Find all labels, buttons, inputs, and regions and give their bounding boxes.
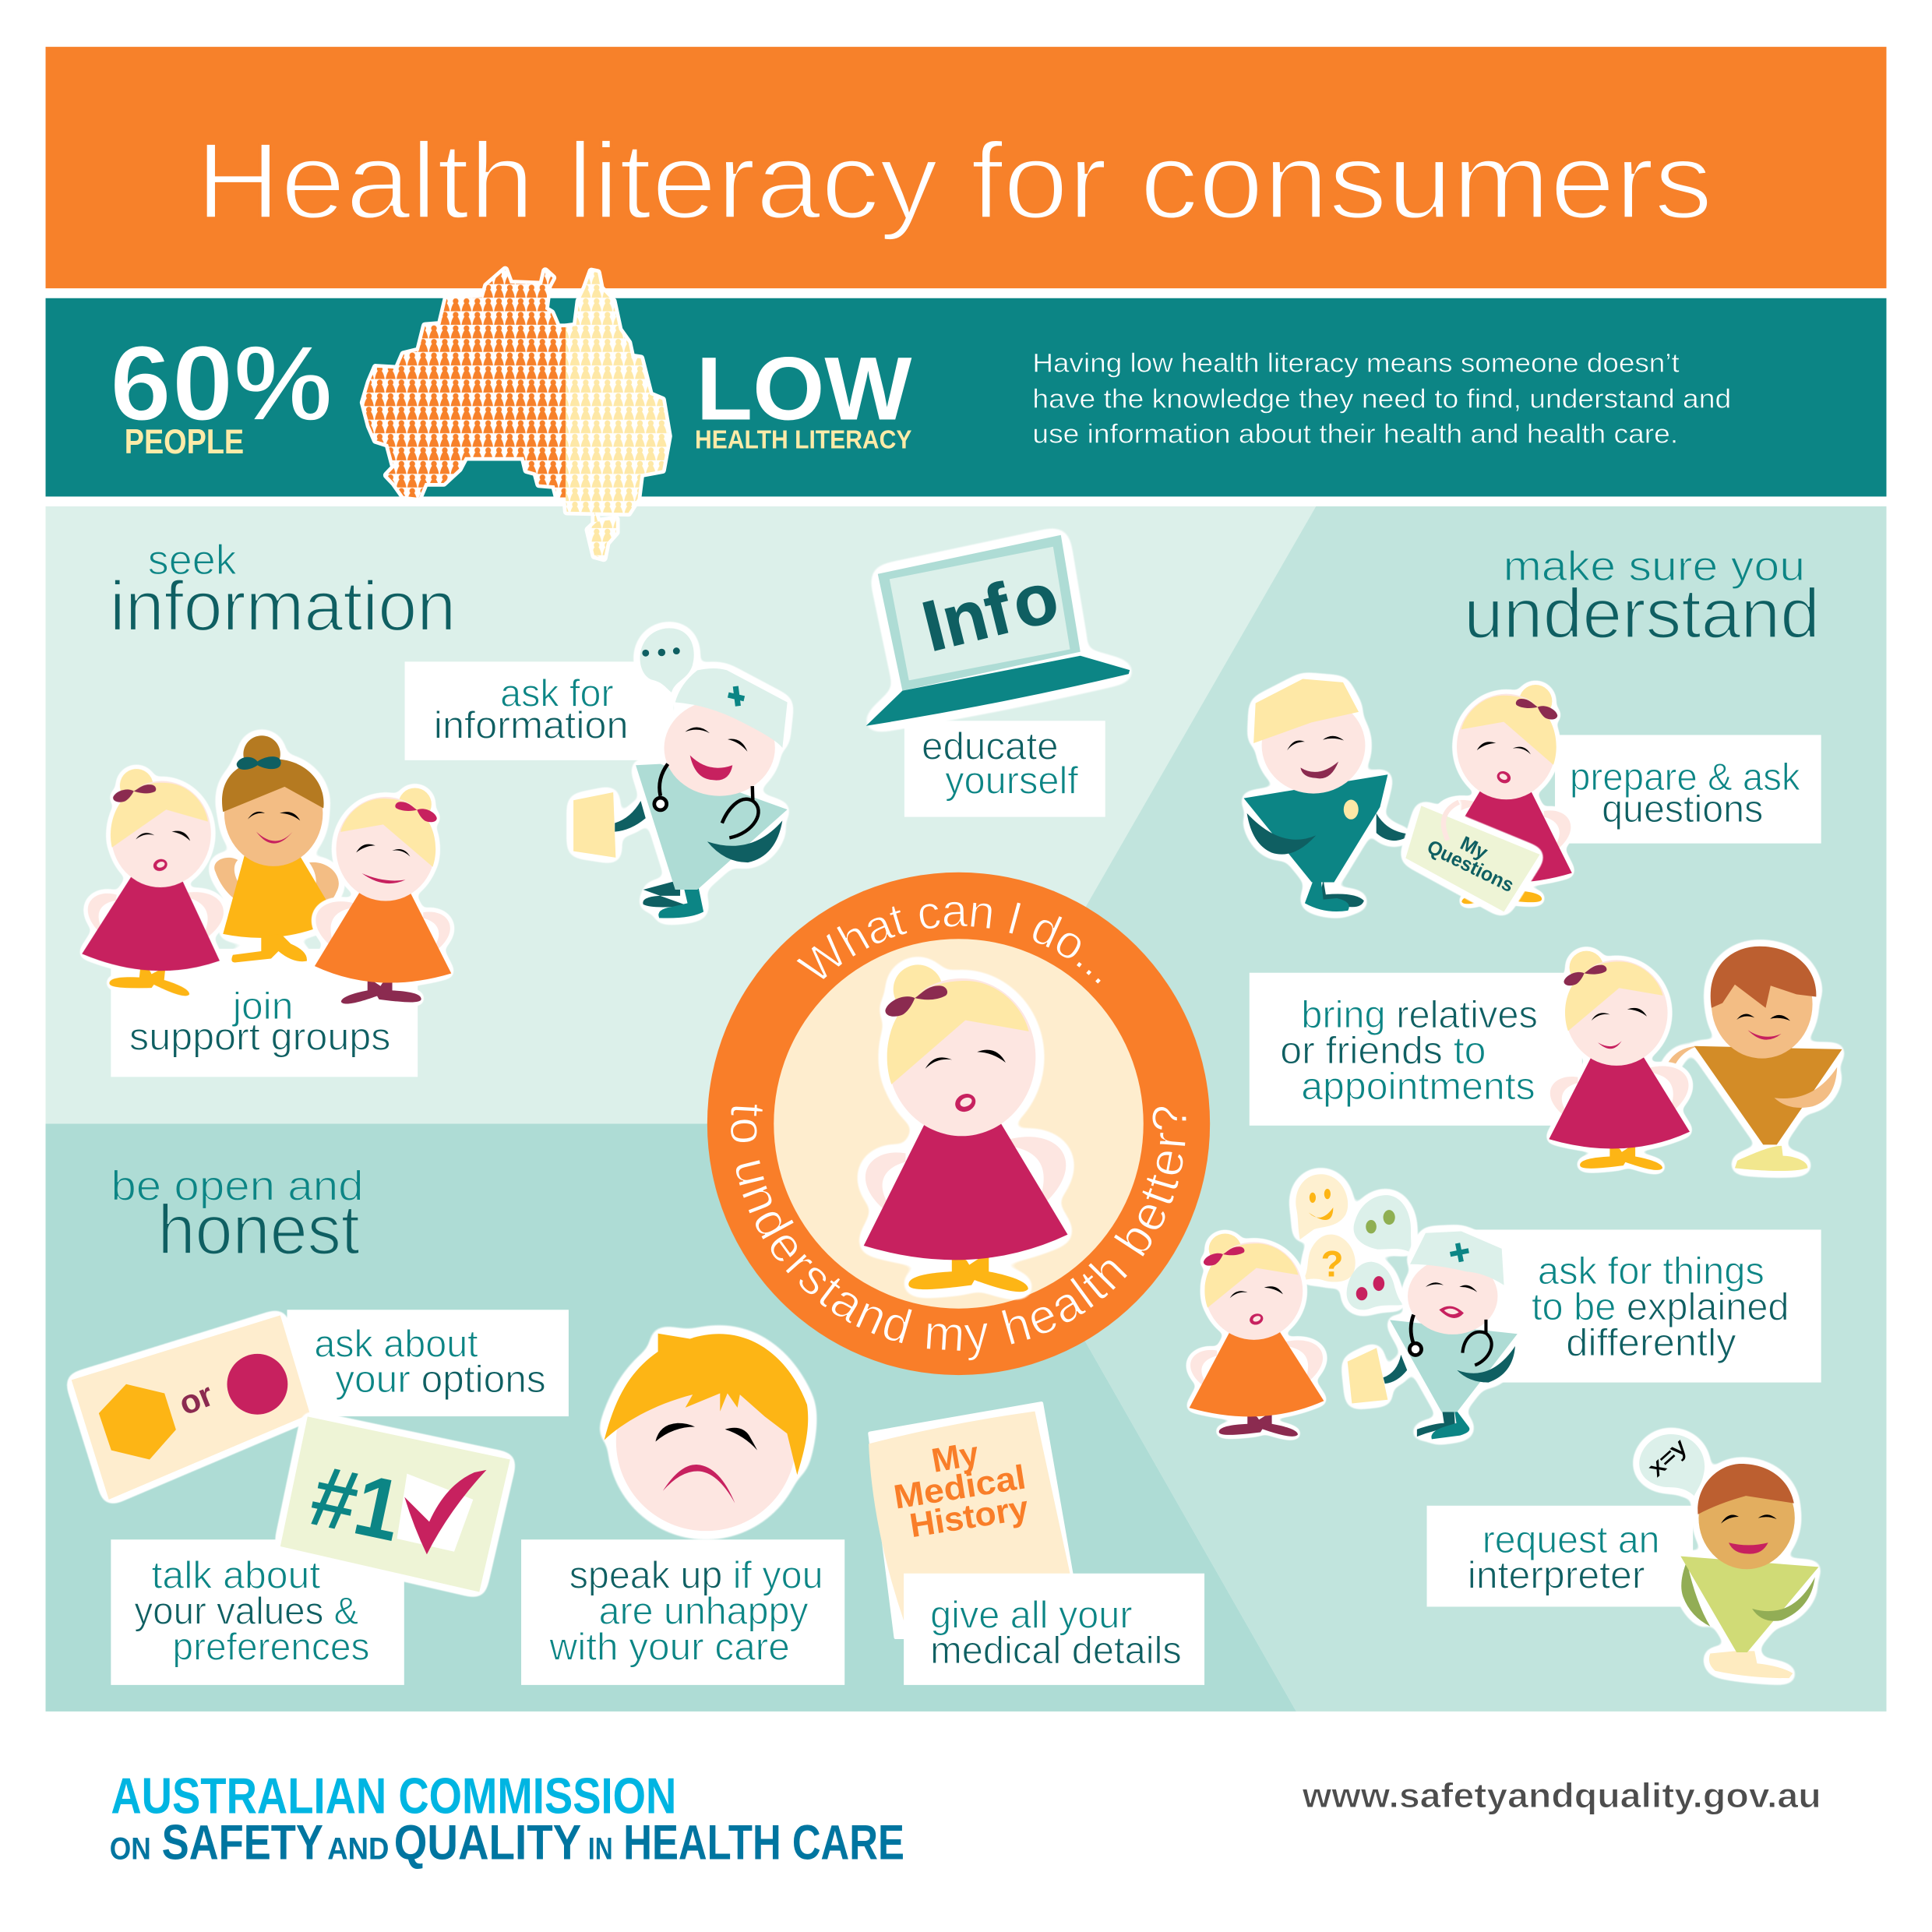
heading: make sure you understand: make sure you [1504, 543, 1805, 590]
footer logo: Australian Commission: AUSTRALIAN COMMISSION [111, 1767, 676, 1824]
label box: join support groups: join [231, 985, 293, 1028]
character: woman preparing questions [1435, 685, 1572, 904]
statistic banner [46, 298, 1886, 496]
label box: give all your medical details [904, 1574, 1204, 1685]
character: woman in orange asking [1190, 1234, 1324, 1437]
heading: be open and honest [111, 1163, 364, 1269]
bubble: green dots [1354, 1195, 1411, 1252]
label box: speak up: speak up if you [569, 1555, 823, 1597]
character: nurse with speech bubble and clipboard [573, 628, 788, 918]
footer logo: Australian Commission: ON [110, 1832, 151, 1867]
label box: ask for information: ask for [500, 672, 614, 714]
heading: be open and honest: honest [157, 1190, 360, 1269]
title banner [46, 47, 1886, 288]
icon: my medical history folder: History [907, 1490, 1031, 1545]
panel: be open and honest background [46, 1123, 1296, 1712]
panel: make sure you understand background [961, 506, 1886, 1712]
speech bubble: x=y: x=y [1644, 1434, 1692, 1482]
label box: talk about values and preferences: your values & [134, 1591, 358, 1633]
icon: number one priority card: #1 [303, 1447, 410, 1560]
label box: educate yourself: educate [922, 725, 1059, 767]
label box: ask for information: information [434, 704, 629, 746]
label box: join support groups [111, 949, 418, 1077]
footer logo: Australian Commission: QUALITY [394, 1816, 581, 1870]
bubble: smile [1296, 1174, 1348, 1239]
label box: prepare and ask questions: prepare & ask [1570, 756, 1800, 799]
low heading: LOW [696, 339, 911, 439]
heading: be open and honest: be open and [111, 1163, 364, 1210]
label box: speak up: with your care [548, 1626, 790, 1668]
label box: talk about values and preferences: preferences [172, 1626, 369, 1668]
character: unhappy boy head [605, 1334, 808, 1531]
label box: ask about your options: ask about [314, 1323, 478, 1365]
label box: speak up [521, 1539, 844, 1685]
icon: number one priority card [280, 1416, 510, 1592]
icon: my questions card [1405, 802, 1540, 911]
heading: make sure you understand: understand [1464, 574, 1820, 653]
title: Health literacy for consumers [196, 121, 1712, 242]
character: man requesting an interpreter [1639, 1434, 1818, 1678]
bubble: question mark: ? [1321, 1244, 1343, 1285]
label box: ask for things to be explained differently: differently [1566, 1322, 1736, 1364]
label box: ask for things to be explained differently: ask for things [1538, 1250, 1765, 1292]
label box: talk about values and preferences: talk about [152, 1555, 321, 1597]
label box: bring relatives or friends: or friends to [1280, 1030, 1486, 1072]
definition text [1032, 349, 1731, 450]
central circle: what can I do [707, 873, 1211, 1376]
label box: ask for things to be explained differently: to be explained [1532, 1286, 1789, 1328]
speech bubble with dots [640, 628, 694, 693]
label box: bring relatives or friends: appointments [1301, 1066, 1535, 1108]
character: support group woman in magenta [79, 765, 238, 999]
map of Australia made of people [364, 270, 668, 558]
definition text: use information about their health and health care. [1032, 420, 1678, 450]
circular text: bottom: to understand my health better? [731, 1105, 1186, 1360]
heading: seek information: information [110, 567, 456, 646]
footer logo: Australian Commission: SAFETY [162, 1816, 323, 1870]
label box: bring relatives or friends [1250, 973, 1582, 1126]
label box: prepare and ask questions [1555, 735, 1821, 844]
icon: my questions card: My [1457, 832, 1491, 864]
label box: bring relatives or friends: bring relatives [1301, 994, 1538, 1036]
icon: my medical history folder: My [929, 1435, 982, 1480]
bubble: magenta dots [1347, 1262, 1403, 1310]
heading: seek information: seek [148, 537, 237, 583]
definition text: have the knowledge they need to find, understand and [1032, 385, 1731, 414]
label box: request an interpreter: interpreter [1468, 1555, 1645, 1597]
icon: my medical history folder [869, 1403, 1071, 1638]
icon: options card: or [174, 1376, 219, 1423]
60% statistic: 60% [110, 323, 333, 443]
icon: laptop showing Info [866, 535, 1130, 726]
screen text: Info [915, 557, 1066, 667]
definition text: Having low health literacy means someone doesn’t [1032, 349, 1680, 379]
icon: my medical history folder: Medical [891, 1458, 1028, 1517]
label box: ask for information [405, 661, 673, 760]
bubble: question mark [1303, 1235, 1356, 1285]
panel: seek information background [46, 506, 1316, 1123]
label box: ask about your options: your options [335, 1359, 546, 1401]
character: woman bringing a relative [1549, 951, 1690, 1170]
health literacy label: HEALTH LITERACY [695, 426, 911, 455]
label box: ask for things to be explained differently [1468, 1229, 1821, 1383]
character: central woman [864, 964, 1067, 1292]
icon: options card [72, 1315, 310, 1500]
label box: request an interpreter: request an [1482, 1519, 1659, 1561]
label box: speak up: are unhappy [599, 1591, 809, 1633]
label box: talk about values and preferences [111, 1539, 404, 1685]
people label: PEOPLE [125, 423, 244, 461]
label box: request an interpreter [1427, 1506, 1693, 1606]
character: relative with brown hair [1663, 947, 1842, 1171]
label box: ask about your options [287, 1310, 569, 1416]
character: support group woman with brown hair [214, 735, 339, 962]
speech bubble: x=y [1639, 1434, 1705, 1496]
speech bubbles [1296, 1174, 1411, 1310]
footer logo: Australian Commission: HEALTH CARE [623, 1816, 904, 1870]
label box: educate yourself: yourself [945, 760, 1078, 802]
icon: my questions card: Questions [1423, 836, 1518, 897]
circular text: top: What can I do... [796, 902, 1101, 983]
footer logo: Australian Commission: AND [327, 1832, 389, 1867]
footer website: www.safetyandquality.gov.au [1302, 1777, 1821, 1815]
footer logo: Australian Commission [110, 1767, 904, 1870]
label box: educate yourself [904, 721, 1105, 817]
character: nurse explaining [1348, 1232, 1518, 1439]
character: doctor in teal [1243, 679, 1412, 911]
label box: give all your medical details: give all your [930, 1594, 1133, 1636]
label box: prepare and ask questions: questions [1602, 788, 1763, 830]
label box: join support groups: support groups [129, 1017, 390, 1059]
character: support group woman in orange [315, 788, 451, 1004]
label box: give all your medical details: medical details [930, 1630, 1182, 1672]
footer logo: Australian Commission: IN [588, 1832, 613, 1867]
